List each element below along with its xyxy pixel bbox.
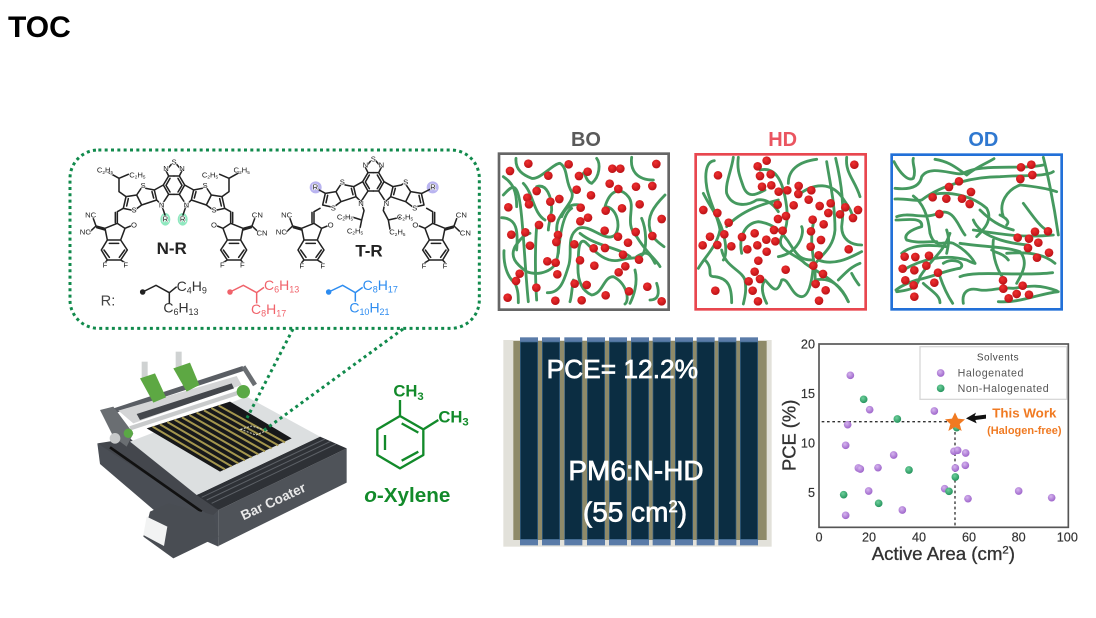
molecule T-R: 2 (395, 232, 398, 237)
molecule T-R: 5 (411, 217, 414, 222)
title: TOC (8, 11, 71, 44)
molecule N-R: 2 (207, 175, 210, 180)
benzene ring and methyl bonds (377, 400, 438, 468)
molecule N-R: F (220, 260, 225, 269)
machine base left side (97, 443, 218, 547)
molecule T-R: S (371, 154, 376, 163)
molecule N-R: CN (252, 210, 263, 219)
molecule T-R: N (363, 161, 368, 170)
area text: (55 cm (583, 496, 668, 527)
molecule T-R: F (443, 262, 448, 271)
molecule N-R: N (179, 164, 185, 173)
molecule N-R: C (234, 166, 239, 175)
box HD (696, 154, 866, 309)
molecule N-R: H (210, 170, 216, 179)
molecule N-R: R (180, 215, 186, 224)
coated substrate with stripes (147, 402, 292, 472)
molecule T-R: 5 (403, 232, 406, 237)
molecule N-R: H (137, 170, 143, 179)
molecule T-R: H (345, 212, 351, 221)
molecule T-R: H (355, 226, 361, 235)
molecule N-R: N (163, 164, 169, 173)
non-halogenated points (840, 395, 960, 507)
molecule T-R: 2 (352, 231, 355, 236)
o-xylene structure (364, 382, 469, 507)
panel: HD morphology (696, 129, 866, 309)
side chain: red: 17 (276, 308, 286, 318)
side chain: black: H (178, 300, 189, 316)
molecule N-R: C (97, 166, 102, 175)
y axis labels: 10 (801, 436, 815, 450)
heading BO: BO (571, 129, 601, 151)
area text: ) (678, 496, 687, 527)
molecule T-R: 2 (402, 217, 405, 222)
molecule N-R: F (103, 260, 108, 269)
molecule N-R: NC (80, 228, 91, 237)
molecule T-R: 2 (342, 217, 345, 222)
PCE text: PCE= 12.2% (547, 354, 698, 384)
molecule T-R: C (397, 212, 402, 221)
molecule T-R: C (337, 212, 342, 221)
device photo (503, 337, 772, 547)
y axis title: PCE (%) (778, 400, 799, 471)
panel: OD morphology (892, 129, 1062, 309)
molecule T-R: 5 (361, 231, 364, 236)
side chain: red (228, 277, 299, 318)
molecule T-R: S (412, 204, 417, 213)
x axis labels: 60 (962, 530, 976, 544)
molecule N-R: O (211, 221, 217, 230)
machine front face (218, 448, 347, 546)
left top rail (97, 438, 218, 517)
ribbed edge (197, 437, 347, 510)
molecule T-R: T-R (355, 242, 383, 261)
molecule N-R: N (184, 200, 189, 209)
molecule T-R: F (422, 262, 427, 271)
molecule N-R: C (129, 170, 135, 179)
molecule N-R: 5 (111, 170, 114, 175)
molecule N-R: H (242, 166, 247, 175)
molecule T-R: C (389, 228, 395, 237)
side chain: red: 13 (289, 284, 299, 294)
molecule T-R: N (358, 199, 364, 208)
halogenated points (842, 371, 1055, 519)
molecule N-R: S (140, 181, 146, 190)
y axis labels (801, 338, 815, 500)
polymer chains HD (698, 157, 862, 304)
molecule N-R: C (202, 170, 207, 179)
plot frame (819, 344, 1068, 527)
molecule N-R: 5 (247, 170, 250, 175)
this work label: This Work (992, 406, 1057, 421)
molecule T-R: CN (456, 210, 467, 219)
x axis title: 2 (1002, 544, 1009, 556)
molecule T-R: H (397, 228, 403, 237)
x axis labels: 100 (1057, 530, 1078, 544)
side chain: black: H (192, 278, 202, 294)
methyl label right: CH (438, 407, 462, 426)
panel outline (70, 150, 479, 328)
side chain: blue: H (369, 300, 380, 316)
side chain: blue: C (363, 277, 373, 293)
bed plate (130, 397, 320, 495)
coating head frame (100, 367, 255, 447)
legend: Halogenated (958, 368, 1024, 380)
methyl label right: 3 (462, 417, 469, 429)
side chain: blue: 21 (380, 307, 390, 317)
side chain: black: C (163, 300, 173, 316)
side chain: red: H (266, 301, 276, 317)
side chain: blue: C (349, 300, 359, 316)
clamp left (140, 362, 166, 403)
molecule N-R: N (159, 200, 164, 209)
x axis labels (815, 530, 1078, 544)
x axis labels: 80 (1012, 530, 1026, 544)
heading HD: HD (768, 129, 797, 151)
molecule T-R: H (405, 212, 411, 221)
scatter chart (778, 338, 1078, 564)
halogen-free label: (Halogen-free) (987, 425, 1062, 437)
x axis labels: 40 (912, 530, 926, 544)
molecule T-R: O (412, 221, 418, 230)
x axis labels: 20 (862, 530, 876, 544)
molecule N-R (80, 158, 268, 269)
legend (920, 347, 1067, 399)
side chain: blue: 17 (388, 284, 398, 294)
molecule T-R: O (328, 221, 334, 230)
side chain: red: H (279, 277, 289, 293)
acceptor particles HD (698, 156, 862, 306)
guide lines (822, 422, 955, 527)
cell stripes (520, 337, 758, 545)
bar coater machine (97, 352, 347, 558)
molecule N-R: S (211, 206, 217, 215)
side chain: black: 9 (202, 285, 207, 295)
legend: Non-Halogenated (958, 383, 1049, 395)
x axis title: ) (1009, 543, 1015, 564)
acceptor particles BO (503, 159, 666, 306)
control unit (143, 503, 218, 558)
molecule T-R: 5 (351, 217, 354, 222)
star marker (945, 412, 965, 431)
molecule N-R: F (123, 260, 128, 269)
molecule N-R: S (171, 158, 177, 167)
molecule N-R: 5 (143, 175, 146, 180)
molecule T-R: R (313, 183, 319, 192)
side chain: red: 6 (274, 284, 279, 294)
molecule N-R: O (131, 221, 137, 230)
side chain: black: 4 (187, 285, 192, 295)
side chain: black: C (177, 278, 187, 294)
molecule N-R: 2 (102, 170, 105, 175)
y axis labels: 5 (808, 486, 815, 500)
side chain: blue: H (378, 277, 388, 293)
molecule T-R: N (379, 161, 384, 170)
clamp right (173, 352, 199, 392)
molecule T-R: F (299, 262, 304, 271)
molecule T-R: R (430, 183, 436, 192)
blend text: PM6:N-HD (568, 455, 704, 486)
side chain: red: C (264, 277, 274, 293)
molecule T-R: C (347, 226, 352, 235)
methyl label top: 3 (417, 391, 424, 403)
molecule T-R: NC (281, 210, 293, 219)
molecule N-R: F (240, 260, 245, 269)
methyl label top: CH (393, 382, 417, 401)
x axis labels: 0 (815, 530, 823, 544)
side chain: blue: 8 (373, 284, 378, 294)
molecule T-R: S (340, 178, 345, 187)
o-xylene label: o-Xylene (364, 484, 450, 507)
y axis labels: 20 (801, 338, 815, 352)
polymer chains OD (894, 157, 1058, 303)
side chain: black (141, 278, 207, 317)
molecule N-R: 5 (216, 175, 219, 180)
side chain: blue (327, 277, 398, 317)
molecule N-R: NC (85, 210, 97, 219)
legend: Solvents (977, 353, 1019, 364)
side chain: blue: 10 (359, 307, 369, 317)
molecule N-R: R (163, 215, 169, 224)
side chain: black: 6 (173, 307, 178, 317)
polymer chains BO (502, 157, 665, 304)
arrow to star (966, 413, 986, 423)
panel: BO morphology (499, 129, 669, 310)
molecule N-R: 2 (239, 170, 242, 175)
bar coater label: Bar Coater (238, 480, 309, 523)
molecule T-R: S (331, 204, 336, 213)
panel: molecular structures (70, 150, 479, 328)
substrate (503, 340, 772, 547)
x axis title: Active Area (cm (872, 543, 1002, 564)
side chain: red: C (251, 301, 261, 317)
box OD (892, 155, 1062, 309)
molecule T-R: CN (460, 228, 471, 237)
molecule N-R: S (202, 181, 208, 190)
side chain: red: 8 (261, 308, 266, 318)
molecule T-R: NC (276, 228, 287, 237)
y axis labels: 15 (801, 387, 815, 401)
box BO (499, 154, 669, 310)
side chain: black: 13 (189, 307, 199, 317)
molecule N-R: 2 (135, 175, 138, 180)
acceptor particles OD (898, 160, 1053, 303)
molecule N-R: H (105, 166, 111, 175)
connector lines from molecule panel to bar coater (247, 329, 403, 431)
molecule T-R: N (384, 199, 389, 208)
dotted spot on substrate (241, 426, 267, 435)
molecule N-R: S (131, 206, 137, 215)
molecule T-R: S (403, 178, 408, 187)
molecule T-R (276, 154, 471, 271)
area text: 2 (668, 497, 678, 516)
molecule N-R: N-R (157, 239, 187, 258)
R label: R: (101, 293, 115, 309)
heading OD: OD (968, 129, 998, 151)
molecule N-R: CN (256, 228, 268, 237)
molecule T-R: F (320, 262, 325, 271)
